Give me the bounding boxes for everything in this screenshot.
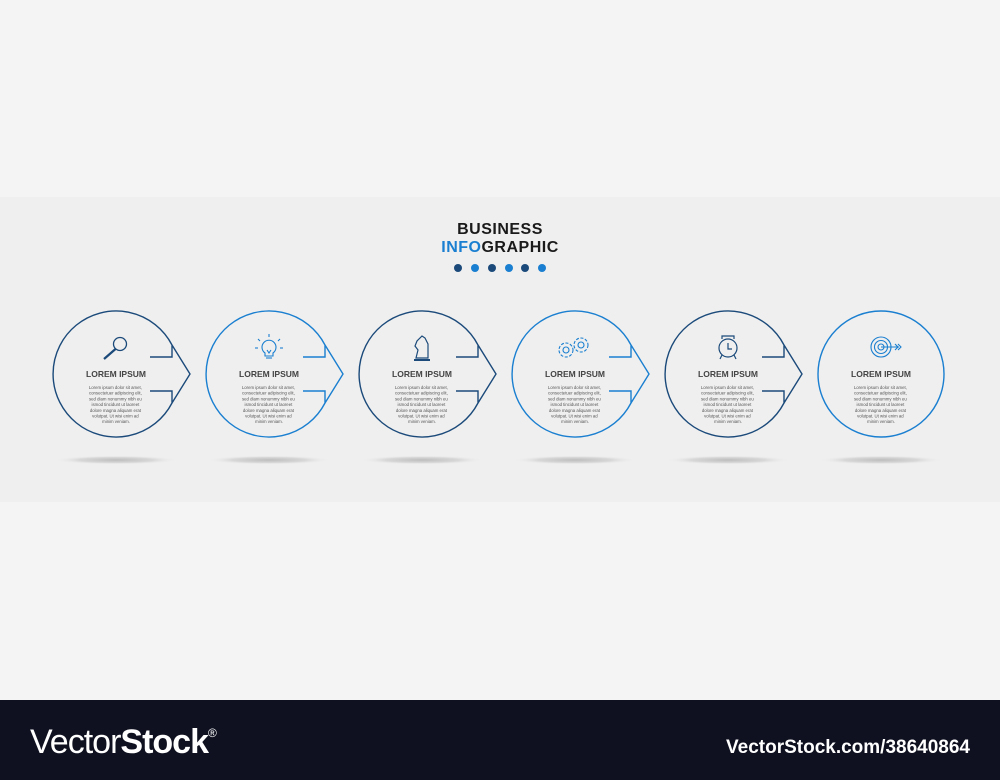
footer: ® [208, 726, 217, 740]
title: INFOGRAPHIC [441, 239, 559, 256]
step 3: LOREM IPSUM [392, 369, 452, 379]
step 1 [53, 311, 190, 464]
footer: VectorStock.com/38640864 [726, 737, 970, 758]
step 2: LOREM IPSUM [239, 369, 299, 379]
title: BUSINESS [457, 221, 543, 238]
background band [0, 197, 1000, 502]
icon: target [871, 337, 901, 357]
icon: light bulb [255, 334, 283, 358]
step 4: LOREM IPSUM [545, 369, 605, 379]
arrow circle [206, 311, 343, 437]
icon: alarm clock [719, 336, 737, 359]
arrow circle [512, 311, 649, 437]
title dots [454, 264, 546, 272]
title [441, 221, 559, 256]
step 2 [206, 311, 343, 464]
step 4 [512, 311, 649, 464]
circle [818, 311, 944, 437]
step 5 [665, 311, 802, 464]
step 5: LOREM IPSUM [698, 369, 758, 379]
icon: magnifier [104, 338, 126, 359]
step 1: LOREM IPSUM [86, 369, 146, 379]
icon: chess knight [414, 336, 430, 360]
footer: VectorStock [30, 723, 208, 761]
step 3 [359, 311, 496, 464]
icon: gears [559, 338, 588, 357]
step 6: LOREM IPSUM [851, 369, 911, 379]
arrow circle [665, 311, 802, 437]
arrow circle [53, 311, 190, 437]
arrow circle [359, 311, 496, 437]
footer [0, 700, 1000, 780]
step 6 [818, 311, 944, 464]
